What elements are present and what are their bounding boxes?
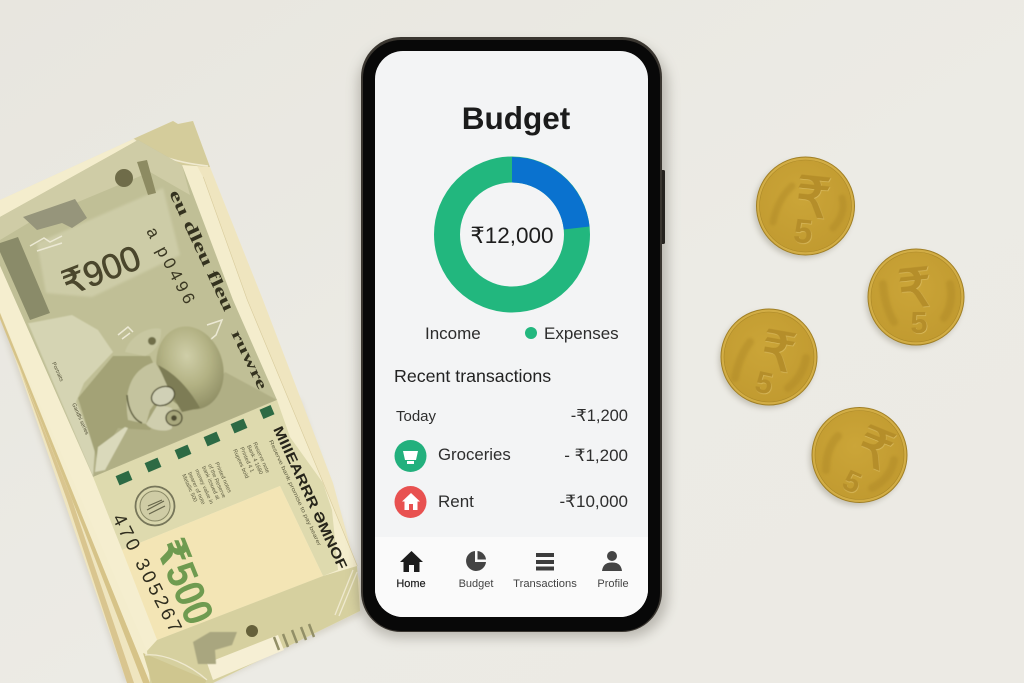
fine print blocks: Reserve bank promise to pay bearer	[267, 439, 322, 547]
fine print blocks: of the Reserve	[206, 463, 226, 499]
left cream strip	[0, 266, 157, 651]
transaction row: groceries	[394, 440, 628, 472]
screen	[375, 51, 648, 617]
barcode stripes	[274, 624, 314, 650]
serial top: a p0496	[142, 224, 199, 307]
note shadow	[0, 300, 362, 683]
cream window	[122, 486, 323, 640]
coin 2: ₹	[895, 257, 935, 321]
shawl	[28, 315, 113, 477]
lit cheek	[127, 362, 168, 424]
bottom band	[147, 566, 360, 683]
fine print blocks: Rupees bold	[231, 448, 249, 480]
glasses	[148, 383, 178, 409]
coin 4: ₹	[848, 415, 902, 484]
transaction row: rent: Rent	[438, 492, 474, 511]
coin 2: 5	[910, 305, 928, 340]
coin 1: 5	[792, 212, 815, 252]
nav item: budget	[459, 551, 493, 590]
phone body	[361, 37, 662, 632]
fine print blocks: Reserve note	[251, 441, 270, 474]
coin 1: ₹	[792, 164, 834, 231]
section heading: recent transactions: Recent transactions	[394, 366, 551, 386]
front note cream base	[0, 121, 360, 683]
nav item: transactions: Transactions	[513, 578, 577, 590]
green security marks	[116, 405, 274, 485]
top beige print	[0, 140, 190, 240]
light band behind value	[37, 188, 180, 297]
coin 1	[754, 157, 854, 258]
value ₹900: ₹900	[57, 238, 146, 303]
lower portrait background	[80, 372, 277, 477]
portrait side captions	[50, 361, 90, 436]
bottom band dot	[246, 625, 258, 637]
transaction row: today	[396, 407, 628, 425]
lower drape	[95, 427, 128, 472]
portrait	[28, 315, 277, 477]
bottom white stripe	[207, 635, 284, 680]
phone shadow	[358, 44, 668, 638]
secondary script: ruwre	[227, 328, 270, 393]
emblem	[115, 160, 156, 195]
side buttons	[660, 170, 665, 244]
nav item: home: Home	[396, 578, 426, 590]
coin 4: 5	[838, 464, 866, 501]
bank name: MIIIEARRR ƏMNOF	[270, 424, 351, 572]
fine print blocks: bearer of note	[186, 471, 206, 506]
back paper layer	[0, 121, 360, 683]
fine print blocks: money value in	[193, 468, 214, 505]
top corner tan	[133, 121, 210, 167]
portrait side captions: Portraits	[50, 361, 64, 383]
white flourish marks	[30, 236, 222, 340]
bottom band stain	[193, 632, 237, 664]
coin 2	[866, 249, 964, 348]
serial number bottom: 470 305267	[108, 511, 185, 636]
nose and mouth	[146, 404, 172, 431]
transaction row: groceries: Groceries	[438, 445, 511, 464]
legend	[425, 324, 619, 343]
coin 3: 5	[752, 364, 776, 402]
coin 3: ₹	[756, 320, 800, 385]
faded stamp patch	[23, 199, 87, 230]
lower note panel	[93, 400, 338, 576]
bottom navigation bar	[375, 537, 648, 617]
fine print blocks: Bank 4 1680	[245, 444, 263, 476]
back layer tan edges	[0, 314, 134, 683]
phone	[361, 37, 665, 632]
transaction row: groceries: - ₹1,200	[564, 446, 628, 465]
round seal	[136, 486, 174, 526]
head	[147, 319, 233, 417]
fine print blocks: Metallic 500	[180, 473, 198, 503]
transaction row: rent	[394, 486, 628, 518]
icon: cart	[403, 451, 418, 464]
nav item: home	[396, 551, 426, 590]
green ₹500: ₹500	[147, 532, 223, 631]
nav item: profile: Profile	[597, 578, 629, 590]
icon: house	[402, 493, 420, 510]
donut centre value: ₹12,000	[470, 223, 554, 248]
devanagari style title: eu dleu fleu	[165, 187, 238, 314]
transaction row: today: -₹1,200	[571, 407, 628, 425]
transaction row: today: Today	[396, 408, 437, 425]
coin 3	[719, 309, 817, 408]
heading: Budget: Budget	[462, 100, 571, 136]
legend: Expenses	[544, 324, 619, 343]
nav item: profile	[597, 551, 629, 590]
fine print blocks: Printed 4 1	[238, 446, 255, 474]
nav item: transactions	[513, 553, 577, 590]
donut chart	[447, 157, 590, 300]
portrait panel	[0, 140, 277, 477]
neck and face shadow	[78, 356, 170, 462]
bottom corners	[143, 653, 207, 683]
coin 4	[810, 408, 907, 506]
ear	[125, 328, 161, 356]
fine print blocks	[180, 439, 322, 547]
transaction row: rent: -₹10,000	[560, 492, 628, 511]
dark security panel	[0, 237, 50, 320]
legend: Income	[425, 324, 481, 343]
portrait side captions: Gandhi series	[70, 402, 90, 436]
banknote stack	[0, 121, 362, 683]
nav item: budget: Budget	[459, 578, 493, 590]
brow shadow	[158, 365, 200, 412]
fine print blocks: bank issued at	[200, 465, 221, 501]
fine print blocks: Printed notes	[213, 461, 232, 494]
